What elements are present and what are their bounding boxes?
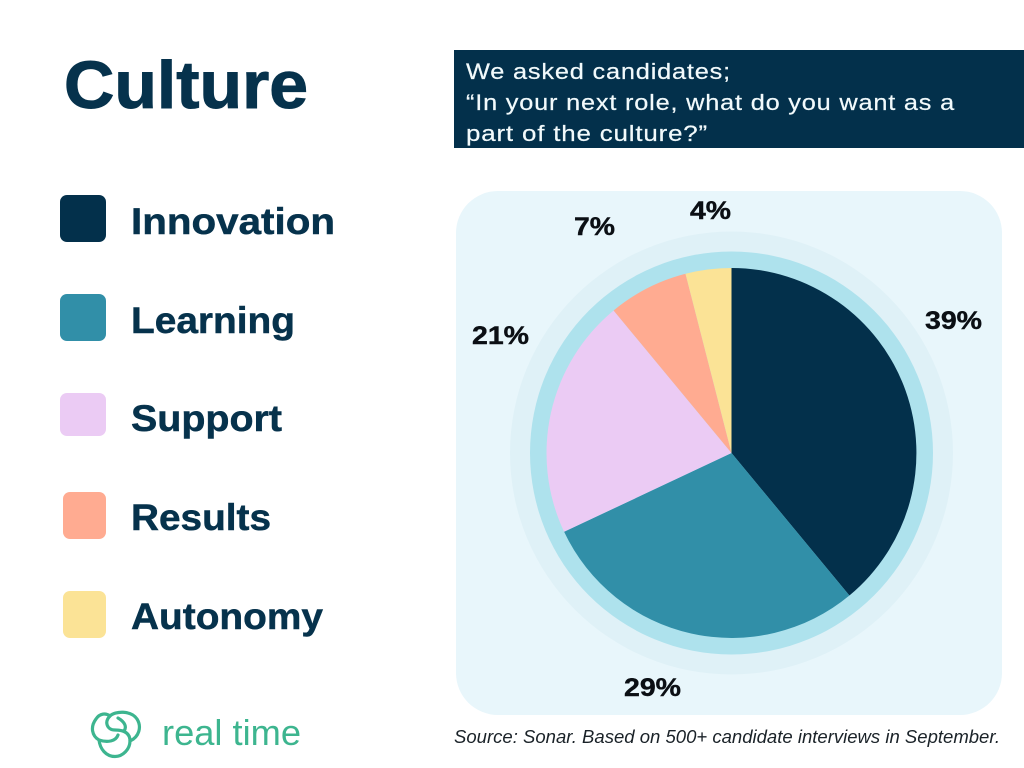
legend — [60, 195, 335, 638]
legend item: Autonomy: Autonomy — [131, 596, 323, 637]
slice: Results 7% — [614, 274, 732, 453]
value label 7%: 7% — [574, 213, 615, 241]
slice: Learning 29% — [564, 453, 849, 638]
value label 29%: 29% — [624, 674, 681, 702]
panel: chart background — [456, 191, 1002, 715]
legend item: Support: Support — [131, 398, 282, 439]
legend item: Results: Results — [131, 497, 271, 538]
value label 39%: 39% — [925, 307, 982, 335]
question banner — [454, 50, 1024, 148]
logo wordmark: real time — [162, 712, 301, 753]
legend item: Learning — [60, 294, 295, 341]
title: Culture — [64, 48, 308, 123]
legend item: Results — [63, 492, 271, 539]
value label 21%: 21% — [472, 322, 529, 350]
question banner: We asked candidates; — [466, 59, 731, 84]
slice: Innovation 39% — [732, 268, 916, 596]
legend item: Learning: Learning — [131, 300, 295, 341]
question banner: part of the culture?” — [466, 121, 708, 146]
question banner: “In your next role, what do you want as a — [466, 90, 955, 115]
legend item: Support — [60, 393, 282, 439]
legend item: Autonomy — [63, 591, 323, 638]
legend item: Innovation — [60, 195, 335, 242]
slice: Autonomy 4% — [686, 268, 732, 453]
logo: real time — [92, 712, 301, 756]
source note: Source: Sonar. Based on 500+ candidate interviews in September. — [454, 727, 1000, 747]
logo icon — [92, 712, 139, 756]
legend item: Innovation: Innovation — [131, 201, 335, 242]
pie chart — [510, 232, 953, 674]
slice: Support 21% — [547, 310, 732, 532]
value label 4%: 4% — [690, 197, 731, 225]
